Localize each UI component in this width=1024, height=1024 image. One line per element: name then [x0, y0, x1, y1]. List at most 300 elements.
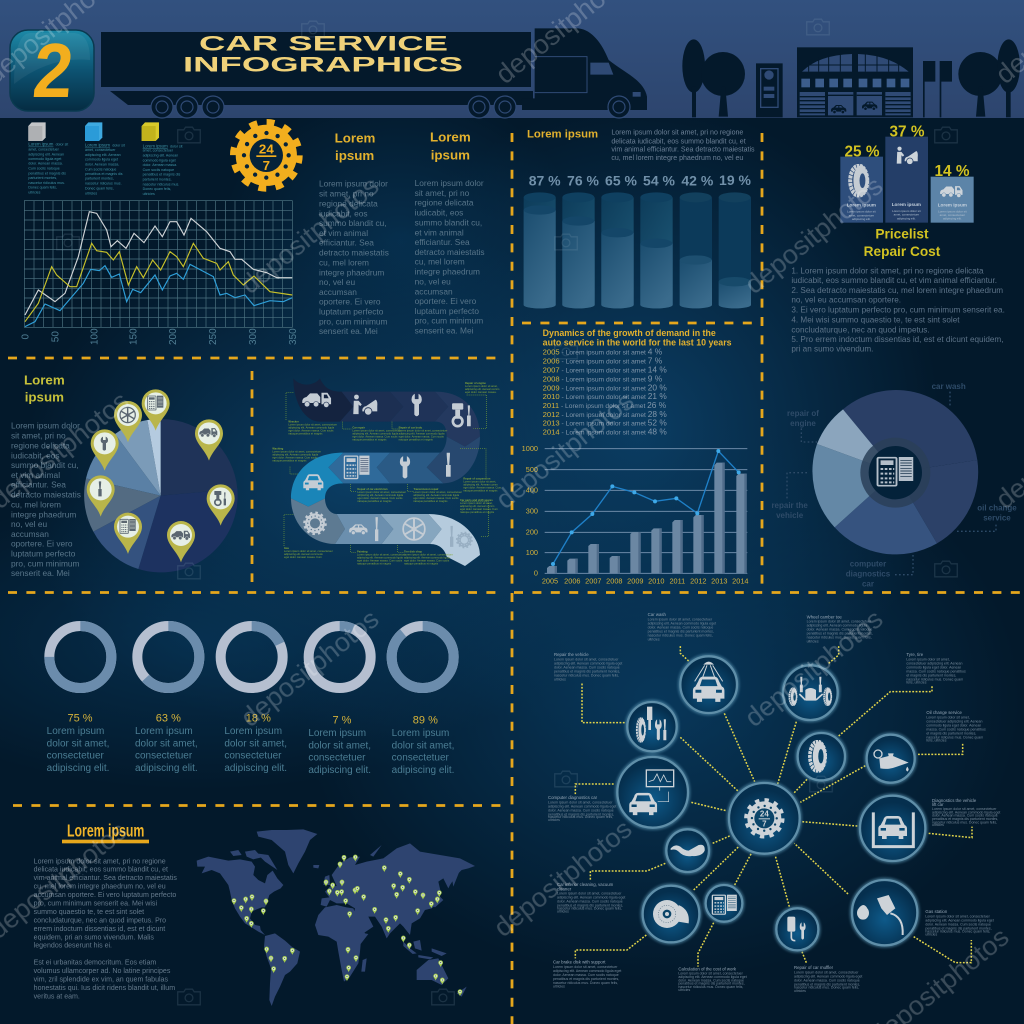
donut captions: Lorem ipsum [47, 726, 104, 737]
panel: legend and line chart [20, 122, 485, 345]
chart axis labels: 350 [288, 328, 299, 345]
hub captions: adipiscing elit. Aenean commodo ligula eget [553, 969, 621, 973]
right pie labels: car wash [932, 382, 966, 391]
snake captions: natoque penatibus et magnis [357, 562, 392, 566]
snake captions: Repair of engine [465, 381, 486, 385]
heading: pie [24, 372, 65, 405]
badge: number 2 [10, 27, 94, 114]
hub captions: Diagnostics the vehicle [932, 798, 977, 803]
legend text: commodo ligula eget [85, 158, 118, 162]
legend text: Donec quam felis, [143, 187, 171, 191]
hub captions: cleaner [557, 886, 572, 891]
map panel text: volumus ullamcorper ad. No latine principes [34, 968, 171, 975]
map panel text: accumsan oportere. Ei vero luptatum perfecto [34, 892, 176, 899]
chart axis labels: 300 [248, 328, 259, 345]
hub captions: nascetur ridiculus mus. Donec quam felis, [553, 981, 618, 985]
chart axis labels: 50 [50, 331, 61, 342]
map panel text: vim animal efficiantur. Sea detracto maiestatis [34, 875, 177, 882]
bars [547, 463, 747, 573]
snake captions: natoque penatibus et magnis [463, 488, 498, 492]
right pie labels: computer [850, 559, 886, 568]
icon: 24/7 gear: 7 [263, 158, 270, 173]
right pie labels [771, 382, 1017, 588]
hub captions: penatibus et magnis dis parturient montes, [548, 812, 614, 816]
text column 1: luptatum perfecto [319, 307, 384, 317]
pie text: pro, cum minimum [11, 558, 80, 568]
snake captions: Car parts and shift spares [460, 498, 493, 502]
hub captions: dolor. Aenean massa. Cum sociis natoque [554, 665, 620, 669]
title [183, 32, 463, 76]
donut captions: dolor sit amet, [392, 740, 454, 751]
snake captions: Washing [272, 446, 284, 450]
snake captions: natoque penatibus et magnis [460, 510, 495, 514]
text column 1: Lorem ipsum dolor [319, 179, 388, 189]
donut captions: dolor sit amet, [224, 738, 287, 749]
donut captions: Lorem ipsum [135, 726, 193, 737]
hub captions: dolor. Aenean massa. Cum sociis natoque [553, 973, 619, 977]
text column 1: accumsan [319, 287, 357, 297]
year list: 2013 [543, 419, 560, 428]
snake captions: eget dolor. Aenean massa. Cum [284, 555, 323, 559]
text column 1: sit amet, pri no [319, 189, 374, 199]
hub captions: consectetuer adipiscing elit. Aenean [906, 661, 962, 665]
snake captions: Lorem ipsum dolor sit amet, consectetuer [357, 490, 406, 494]
snake captions: eget dolor. Aenean massa. [465, 390, 497, 394]
pie text: Lorem ipsum dolor [11, 421, 80, 431]
pricelist numbered text: 3. Ei vero luptatum perfecto pro, cum minimum senserit ea. [791, 306, 1005, 315]
donut captions: Lorem ipsum [224, 726, 282, 737]
panel: pie chart with pins [11, 372, 238, 578]
snake captions: Car repair [352, 425, 365, 429]
hub captions: nascetur ridiculus mus. Donec quam felis, [807, 636, 872, 640]
hub captions: ultricies [807, 640, 819, 644]
right pie slices [812, 390, 978, 554]
chart axis labels [20, 328, 299, 345]
donut captions: Lorem ipsum [308, 728, 366, 739]
pricelist bars: amet, consectetuer [940, 213, 965, 217]
hub captions: adipiscing elit. Aenean commodo ligula eget [932, 810, 1000, 814]
hub captions: ultricies [794, 989, 806, 993]
cylinder intro text: cu, mel lorem integre phaedrum no, vel eu [611, 155, 743, 162]
year list: 2005 [543, 348, 560, 357]
snake captions: eget dolor. Aenean massa. Cum sociis [413, 496, 459, 500]
legend text: Lorem ipsum [85, 143, 110, 148]
donut captions: consectetuer [308, 753, 366, 764]
text column 2: Lorem ipsum dolor [415, 178, 484, 188]
pricelist numbered text: pri an sumo vivendum. [791, 345, 873, 354]
hub captions: nascetur ridiculus mus. Donec quam felis, [648, 633, 713, 637]
right pie labels: oil change [977, 503, 1017, 512]
text column 2: sit amet, pri no [415, 188, 470, 198]
legend text: commodo ligula eget [28, 157, 61, 161]
legend text: nascetur ridiculus mus. [85, 182, 122, 186]
legend text: ultricies [28, 191, 41, 195]
hub icons: 7 [762, 819, 767, 828]
pie text: summo blandit cu, [11, 460, 79, 470]
hub captions: adipiscing elit. Aenean commodo ligula eget [678, 975, 747, 979]
legend text: dolor sit [169, 144, 183, 148]
pricelist bars: adipiscing elit. [943, 217, 962, 221]
bar chart y axis: 1000 [522, 444, 538, 453]
legend text: Cum sociis natoque [143, 168, 174, 172]
hub captions: consectetuer adipiscing elit. Aenean [926, 719, 982, 723]
snake captions: natoque penatibus et magnis [404, 562, 439, 566]
pricelist percentages: 14 % [935, 163, 970, 180]
legend text: dolor sit [55, 143, 68, 147]
snake captions: Lorem ipsum dolor sit amet, consectetuer [404, 553, 453, 557]
snake captions: adipiscing elit. Aenean commodo ligula [352, 431, 399, 435]
year list: 2007 [543, 365, 560, 374]
year list: 2014 [543, 428, 560, 437]
hub captions: Lorem ipsum dolor sit amet, consectetuer [553, 965, 618, 969]
year list: 2010 [543, 392, 560, 401]
text column 1: integre phaedrum [319, 267, 384, 277]
right pie labels: vehicle [776, 511, 804, 520]
hub captions: Car wash [648, 612, 667, 617]
legend text: parturient montes, [143, 177, 172, 181]
heading: column 2: Lorem [430, 130, 471, 145]
bar chart y axis: 0 [534, 569, 538, 578]
bar chart x axis: 2008 [606, 576, 622, 585]
snake captions: natoque penatibus et magnis [272, 458, 307, 462]
donut captions: adipiscing elit. [308, 765, 371, 776]
heading: map panel [62, 821, 149, 843]
bar chart y axis [522, 444, 538, 578]
text column 1: oportere. Ei vero [319, 297, 381, 307]
heading: map panel: Lorem ipsum [67, 821, 144, 841]
hub captions: massa. Cum sociis natoque penatibus [926, 727, 986, 731]
snake captions: adipiscing elit. Aenean commodo ligula [404, 556, 450, 560]
hub captions: dolor. Aenean massa. Cum sociis natoque [932, 814, 998, 818]
depositphotos watermarks: depositphotos [235, 171, 384, 300]
pie text: accumsan [11, 529, 49, 539]
chart axis labels: 250 [208, 328, 219, 345]
map panel text: legendos deserunt his ei. [34, 943, 112, 950]
snake captions: eget dolor. Aenean massa. Cum [463, 485, 502, 489]
heading: cylinder chart: Lorem ipsum [527, 128, 598, 140]
snake segments [291, 378, 480, 566]
snake captions: Lorem ipsum dolor sit amet, consectetuer [399, 428, 447, 432]
bar chart y axis: 500 [526, 465, 538, 474]
year list: 2012 [543, 410, 560, 419]
legend text: commodo ligula eget [143, 158, 176, 162]
hub captions: penatibus et magnis dis parturient montes, [557, 903, 623, 907]
hub captions: Lorem ipsum dolor sit amet, consectetuer [557, 891, 622, 895]
map panel text: Est ei urbanitas democritum. Eos etiam [34, 960, 156, 967]
hub captions: Lorem ipsum dolor sit amet, consectetuer [807, 620, 872, 624]
right pie leaders [787, 392, 996, 575]
hub captions: adipiscing elit. Aenean commodo ligula eget [925, 918, 994, 922]
hub captions: commodo ligula eget dolor. Aenean [906, 665, 961, 669]
hub captions: nascetur ridiculus mus. Donec quam felis, [932, 820, 997, 824]
chart series: white [25, 212, 292, 315]
donut percentages: 89 % [413, 715, 438, 727]
snake captions: natoque penatibus et magnis [413, 499, 448, 503]
hub captions: penatibus et magnis dis parturient montes, [932, 817, 998, 821]
hub leaders [575, 645, 972, 967]
snake captions: adipiscing elit. Aenean commodo [284, 552, 323, 556]
right pie labels: diagnostics [846, 569, 891, 578]
hub captions: nascetur ridiculus mus. Donec quam felis, [678, 985, 743, 989]
hub captions: Lorem ipsum dolor sit amet, consectetuer [548, 800, 613, 804]
text column 2: luptatum perfecto [415, 306, 479, 316]
text column 2: senserit ea. Mei [415, 325, 474, 335]
hub captions: adipiscing elit. Aenean commodo ligula eget [548, 804, 616, 808]
hub captions: penatibus et magnis dis parturient montes, [925, 926, 992, 930]
world map [197, 829, 475, 1006]
year list: - Lorem ipsum dolor sit amet 21 % [562, 391, 667, 401]
header scenery: trees, pump, garage [682, 39, 1020, 117]
hub captions: Wheel camber toe [807, 614, 842, 619]
hub spokes [680, 713, 865, 907]
pricelist bars: Lorem ipsum [892, 202, 921, 207]
cylinder intro text: Lorem ipsum dolor sit amet, pri no regione [611, 130, 743, 137]
snake captions: Painting [357, 550, 368, 554]
hub captions: penatibus et magnis dis parturient montes, [553, 977, 619, 981]
snake captions: eget dolor. Aenean massa. Cum [460, 507, 499, 511]
map panel text: errem indoctum dissentias id, est et dicunt [34, 926, 165, 933]
snake captions: Lorem ipsum dolor sit amet, consectetuer [352, 428, 401, 432]
pricelist bars: Lorem ipsum dolor sit [938, 209, 967, 213]
cylinder intro text: delicata iudicabit, eos summo blandit cu, et [611, 138, 746, 145]
hub captions: penatibus et magnis dis parturient montes, [554, 669, 620, 673]
legend text: amet, consectetuer [28, 147, 60, 151]
hub captions: adipiscing elit. Aenean commodo ligula eget [648, 621, 716, 625]
hub captions: Car interior cleaning, vacuum [557, 882, 614, 887]
map panel text: summo quaestio te, te est sint solet [34, 909, 144, 916]
depositphotos watermarks: depositphotos [488, 814, 637, 943]
snake captions: eget dolor. Aenean massa. Cum sociis [288, 429, 334, 433]
snake captions: adipiscing elit. Aenean commodo ligula [288, 426, 335, 430]
legend text: Donec quam felis, [85, 186, 114, 190]
hub captions: ultricies [678, 988, 690, 992]
donut percentages [67, 713, 438, 727]
cylinders [524, 192, 751, 308]
year list: 2009 [543, 383, 560, 392]
map panel text: concludaturque, nec an quod impetus. Pro [34, 917, 166, 924]
donut captions: dolor sit amet, [308, 740, 371, 751]
pricelist numbered text: 1. Lorem ipsum dolor sit amet, pri no regione delicata [791, 266, 984, 275]
pie text: efficiantur. Sea [11, 480, 66, 490]
heading: pie: Lorem [24, 372, 65, 387]
snake captions: natoque penatibus et magnis [357, 499, 392, 503]
cylinder percentages: 19 % [719, 172, 752, 188]
pie map pins [87, 389, 235, 562]
heading: column 2 [430, 130, 471, 162]
map panel text: honestatis qui. Ius dicit ridens blandit ut, illum [34, 985, 175, 992]
hub icons [629, 662, 913, 941]
title: INFOGRAPHICS [183, 54, 463, 76]
year list: 2011 [543, 401, 559, 410]
snake captions: adipiscing elit. Aenean comm [465, 387, 500, 391]
snake captions: adipiscing elit. Aenean commodo ligula [272, 452, 319, 456]
hub captions: penatibus et magnis dis parturient montes, [794, 982, 860, 986]
snake captions: adipiscing elit. Aenean commodo ligula [413, 493, 460, 497]
text column 2: efficiantur. Sea [415, 237, 470, 247]
donut captions: dolor sit amet, [135, 738, 198, 749]
donut captions: adipiscing elit. [47, 763, 109, 774]
cylinder intro text: vim animal efficiantur. Sea detracto maiestatis [611, 147, 755, 154]
snake captions: eget dolor. Aenean massa. Cum sociis [399, 434, 445, 438]
chart series: yellow [25, 243, 292, 322]
bar chart x axis: 2011 [669, 576, 685, 585]
year list [543, 347, 667, 437]
icon: 24/7 gear [233, 122, 299, 188]
donut captions: dolor sit amet, [47, 738, 109, 749]
cylinder percentages: 87 % [529, 173, 561, 189]
snake captions: Lorem ipsum dolor sit amet, consectetuer [357, 553, 406, 557]
snake captions: Lorem ipsum dolor sit amet, [463, 479, 496, 483]
snake captions: Lorem ipsum dolor sit amet, consectetuer [284, 549, 333, 553]
hub captions: adipiscing elit. Aenean commodo ligula eget [557, 895, 625, 899]
map panel text: pro, cum minimum senserit ea. Mei wisi [34, 901, 157, 908]
snake captions: adipiscing elit. Aenean comm [460, 504, 495, 508]
hub captions: dolor. Aenean massa. Cum sociis natoque [794, 978, 860, 982]
snake captions: eget dolor. Aenean massa. Cum sociis [357, 496, 403, 500]
snake captions: eget dolor. Aenean massa. Cum sociis [272, 455, 318, 459]
depositphotos watermarks: depositphotos [235, 604, 384, 733]
hub captions: ultricies [648, 637, 660, 641]
donut captions: adipiscing elit. [135, 763, 198, 774]
pie text: regione delicata [11, 440, 70, 450]
hub captions: nascetur ridiculus mus. Donec quam [906, 677, 963, 681]
hub captions: nascetur ridiculus mus. Donec quam felis, [548, 815, 613, 819]
hub captions: Lorem ipsum dolor sit amet, consectetuer [932, 807, 997, 811]
pricelist bars: amet, consectetuer [849, 213, 874, 217]
hub captions: massa. Cum sociis natoque penatibus [906, 669, 966, 673]
donut percentages: 7 % [333, 715, 352, 727]
snake captions: Lorem ipsum dolor sit amet, [465, 384, 498, 388]
right pie labels: service [983, 513, 1011, 522]
bar chart x axis: 2014 [732, 576, 748, 585]
legend text: adipiscing elit. Aenean [28, 152, 64, 156]
bar chart x axis: 2007 [585, 576, 601, 585]
heading: dynamics: auto service in the world for the last 10 years [543, 338, 732, 348]
pricelist numbered text: 5. Pro errem indoctum dissentias id, est et dicunt equidem, [791, 335, 1004, 344]
depositphotos watermarks: depositphotos [490, 386, 639, 515]
heading: pricelist repair cost: Repair Cost [864, 244, 941, 259]
snake captions: adipiscing elit. Aenean commodo ligula [357, 493, 404, 497]
hub captions: ultricies [557, 909, 569, 913]
bar chart x axis: 2013 [711, 576, 727, 585]
year list: - Lorem ipsum dolor sit amet 28 % [562, 409, 667, 419]
legend text: parturient montes, [28, 176, 57, 180]
hub captions: nascetur ridiculus mus. Donec quam [926, 735, 983, 739]
snake captions: natoque penatibus et magnis [288, 432, 323, 436]
snake captions: Repair of car body [399, 425, 423, 429]
donut captions [47, 726, 454, 776]
hub captions: penatibus et magnis dis parturient montes, [648, 629, 714, 633]
hub captions: Lorem ipsum dolor sit amet, consectetuer [648, 617, 713, 621]
text column 1: senserit ea. Mei [319, 326, 378, 336]
hub captions: Tyre, tire [906, 652, 924, 657]
donut captions: adipiscing elit. [392, 765, 454, 776]
pie text: cu, mel lorem [11, 499, 61, 509]
hub captions: nascetur ridiculus mus. Donec quam felis, [554, 673, 619, 677]
text column 2: detracto maiestatis [415, 247, 485, 257]
bar chart x axis: 2012 [690, 576, 706, 585]
bar chart y axis: 400 [526, 486, 538, 495]
legend text: amet, consectetuer [143, 149, 174, 153]
heading: pricelist repair cost [864, 227, 941, 259]
heading: dynamics: Dynamics of the growth of demand in the [543, 328, 716, 338]
year list: 2006 [543, 357, 560, 366]
year list: - Lorem ipsum dolor sit amet 20 % [562, 382, 667, 392]
bar chart x axis [542, 576, 748, 585]
header band [0, 0, 1024, 118]
hub circles [617, 656, 925, 950]
legend text: Lorem ipsum [28, 142, 54, 147]
text column 1: no, vel eu [319, 277, 355, 287]
heading: pie: ipsum [25, 390, 64, 405]
hub captions: penatibus et magnis dis parturient montes, [678, 982, 745, 986]
pricelist numbered text: 4. Mei wisi summo quaestio te, te est sint solet [791, 315, 960, 324]
legend text: adipiscing elit. Aenean [143, 154, 178, 158]
legend text: penatibus et magnis dis [143, 173, 180, 177]
pricelist bars [840, 137, 974, 223]
hub captions: commodo ligula eget dolor. Aenean [926, 723, 981, 727]
legend text: dolor sit [111, 144, 125, 148]
legend text: dolor. Aenean massa. [143, 163, 177, 167]
text column 1: summo blandit cu, [319, 218, 387, 228]
pricelist bars: Lorem ipsum dolor sit [847, 210, 876, 214]
hub captions: ultricies [932, 823, 944, 827]
year list: - Lorem ipsum dolor sit amet 26 % [561, 400, 666, 410]
text column 2: regione delicata [415, 198, 474, 208]
heading: dynamics [543, 328, 732, 348]
legend text: parturient montes, [85, 177, 114, 181]
legend text: nascetur ridiculus mus. [143, 182, 179, 186]
pie text: integre phaedrum [11, 509, 76, 519]
hub captions: et magnis dis parturient montes, [906, 673, 956, 677]
chart series: blue [25, 264, 292, 327]
snake captions: adipiscing elit. Aenean comm [463, 482, 499, 486]
bar chart x axis: 2010 [648, 576, 664, 585]
snake captions: Lorem ipsum dolor sit amet, [460, 501, 493, 505]
snake captions: Lorem ipsum dolor sit amet, consectetuer [413, 490, 462, 494]
donut percentages: 75 % [67, 713, 93, 725]
pie slices [84, 419, 238, 572]
text column 1: detracto maiestatis [319, 248, 389, 258]
right pie labels: repair the [771, 501, 808, 510]
pricelist percentages: 37 % [890, 123, 925, 140]
text column 1: efficiantur. Sea [319, 238, 374, 248]
pricelist numbered text: concludaturque, nec an quod impetus. [791, 325, 930, 334]
cylinder percentages [529, 172, 752, 189]
depositphotos watermarks: depositphotos [739, 171, 888, 300]
text column 2: cu, mel lorem [415, 257, 465, 267]
hub captions: et magnis dis parturient montes, [926, 731, 976, 735]
legend text: nascetur ridiculus mus. [28, 181, 65, 185]
donut percentages: 63 % [156, 713, 181, 725]
donuts [49, 626, 454, 688]
hub captions: nascetur ridiculus mus. Donec quam felis, [925, 930, 990, 934]
snake captions: Transmission repair [413, 487, 439, 491]
legend text: dolor. Aenean massa. [85, 162, 119, 166]
text column 1: et vim animal [319, 228, 368, 238]
hub captions: dolor. Aenean massa. Cum sociis natoque [548, 808, 614, 812]
map panel text: Lorem ipsum dolor sit amet, pri no regione [34, 858, 166, 865]
line chart grid [24, 201, 292, 327]
hub captions: Lorem ipsum dolor sit amet, [926, 715, 970, 719]
pricelist numbered text: iudicabit, eos summo blandit cu, et vim animal efficiantur. [791, 276, 997, 285]
hub captions: Lorem ipsum dolor sit amet, consectetuer [794, 970, 859, 974]
hub circle glow [617, 656, 926, 951]
hub captions: Repair of car muffler [794, 965, 834, 970]
pricelist bars: amet, consectetuer [894, 213, 919, 217]
donut captions: consectetuer [224, 751, 282, 762]
legend text: Donec quam felis, [28, 186, 57, 190]
